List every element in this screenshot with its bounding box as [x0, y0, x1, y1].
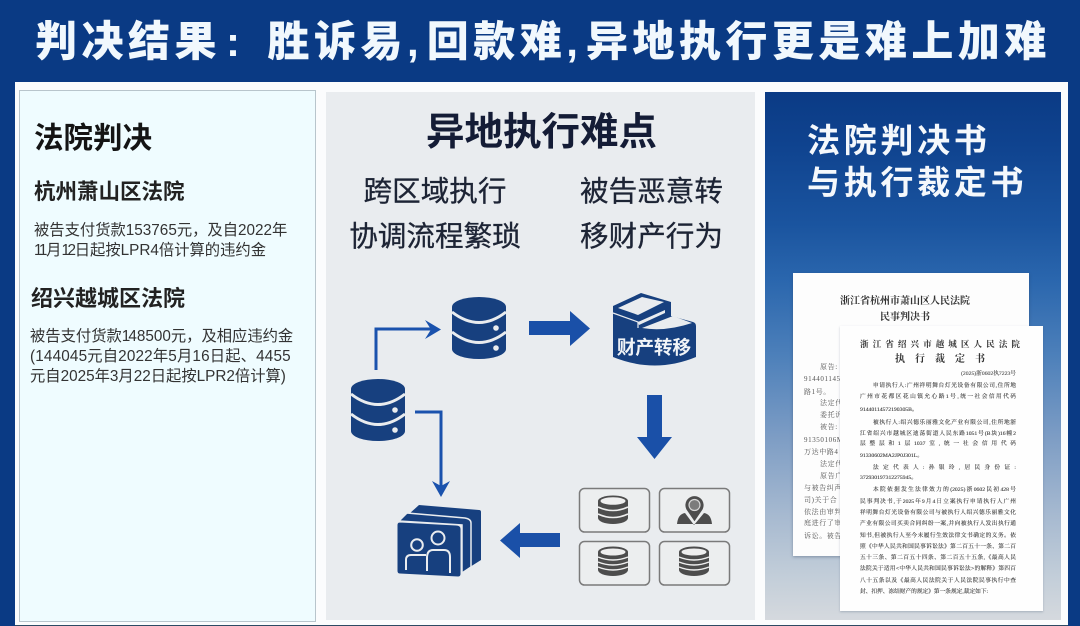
document text: ruling body: 91440114572190305B。	[860, 407, 918, 413]
panel: enforcement difficulties	[326, 92, 755, 620]
icon: asset transfer	[613, 293, 696, 366]
document text: ruling body: 本院依据发生法律效力的(2025)浙0602民初428号	[873, 487, 1016, 493]
bottom edge line	[15, 625, 1068, 626]
heading: judgment and ruling documents: 与执行裁定书	[807, 164, 1027, 201]
box: gray database 1	[580, 488, 650, 532]
heading: enforcement difficulties: 异地执行难点	[426, 111, 657, 154]
text: Hangzhou judgment: 11 月12 日起按LPR4倍计算的违约金	[34, 242, 266, 259]
text: Shaoxing judgment: 被告支付货款148500元，及相应违约金	[30, 328, 293, 345]
document text: ruling body: 照《中华人民共和国民事诉讼法》第二百五十一条、第二百	[860, 544, 1016, 550]
document text: civil judgment body: 被告:	[820, 423, 838, 431]
text: Shaoxing judgment: (144045元自2022年5月16日起、4455	[30, 348, 291, 365]
document: civil judgment	[793, 273, 1029, 556]
heading: court judgment: 法院判决	[34, 122, 152, 155]
document text: ruling body: 法定代表人:孙银玲,居民身份证:	[873, 465, 1016, 471]
document text: ruling body: 封、扣押、冻结财产的规定》第一条规定,裁定如下:	[860, 589, 988, 595]
panel: court judgment	[19, 90, 316, 622]
document text: ruling body	[860, 370, 1016, 595]
document text: ruling body: 五十三条、第二百五十四条、第二百五十五条,《最高人民	[860, 555, 1016, 561]
document title: civil judgment: 浙江省杭州市萧山区人民法院	[840, 296, 970, 307]
icon: database left	[351, 379, 405, 441]
document text: ruling body: 八十五条以及《最高人民法院关于人民法院民事执行中查	[860, 578, 1016, 584]
document title: court name: 浙江省绍兴市越城区人民法院	[860, 339, 1020, 349]
document text: ruling body: 江省绍兴市越城区迪荡街道人民东路1051号(B块)16幢2	[860, 431, 1016, 437]
document text: ruling body: 产业有限公司买卖合同纠纷一案,并向被执行人发出执行通	[860, 521, 1016, 527]
document: enforcement ruling	[839, 326, 1044, 613]
icon: people cards	[397, 505, 481, 577]
document text: civil judgment body	[804, 363, 840, 540]
text: Hangzhou judgment	[34, 222, 287, 259]
box: person location	[660, 488, 730, 532]
text: malicious asset transfer	[580, 176, 723, 253]
arrow: left to people	[500, 523, 560, 558]
document text: ruling body: 民事判决书,于2025年9月4日立案执行申请执行人广州	[860, 499, 1016, 505]
document text: civil judgment body: 司)关于合	[804, 496, 837, 504]
document text: ruling body: 法院关于适用<中华人民共和国民事诉讼法>的解释》第四百	[860, 566, 1016, 572]
heading: Hangzhou Xiaoshan court: 杭州萧山区法院	[34, 180, 185, 204]
label: asset transfer: 财产转移	[617, 337, 691, 358]
title: 判决结果 胜诉易,回款难,异地执行更是难上加难	[35, 18, 1051, 65]
text: malicious asset transfer: 被告恶意转	[580, 176, 723, 208]
document text: ruling body: (2025)浙0602执7223号	[961, 371, 1016, 377]
text: malicious asset transfer: 移财产行为	[580, 221, 723, 253]
document text: civil judgment body: 路1号。	[804, 388, 831, 396]
document text: ruling body: 91330602MA2JP0J301L。	[860, 453, 923, 459]
icon: database top	[452, 297, 506, 359]
arrow: left database to top database	[376, 320, 441, 370]
text: cross-region enforcement	[349, 176, 521, 253]
heading: Shaoxing Yuecheng court: 绍兴越城区法院	[31, 286, 185, 311]
text: Shaoxing judgment	[30, 328, 293, 385]
document title: civil judgment	[840, 295, 970, 323]
title: :	[226, 18, 240, 65]
document title: civil judgment: 民事判决书	[880, 312, 930, 323]
text: Shaoxing judgment: 元自2025年3月22日起按LPR2倍计算)	[30, 368, 286, 385]
box: gray database 2	[580, 542, 650, 585]
text: cross-region enforcement: 跨区域执行	[364, 176, 506, 208]
heading: judgment and ruling documents	[807, 122, 1027, 201]
document text: ruling body: 广州市花都区花山镇允心路1号,统一社会信用代码	[860, 394, 1016, 400]
document text: ruling body: 层整层和1层1037室,统一社会信用代码	[860, 441, 1016, 447]
document text: ruling body: 372930197312275945。	[860, 475, 917, 481]
arrow: left database to people	[415, 412, 450, 497]
document text: ruling body: 被执行人:绍兴德乐丽雅文化产业有限公司,住所地浙	[873, 420, 1016, 426]
arrow: down to assets	[637, 395, 672, 459]
panel: judgment documents	[765, 92, 1061, 620]
heading: judgment and ruling documents: 法院判决书	[807, 122, 990, 159]
text: cross-region enforcement: 协调流程繁琐	[349, 221, 521, 253]
document text: civil judgment body: 万达中路4	[804, 448, 838, 456]
document title: enforcement ruling: 执行裁定书	[895, 354, 985, 365]
box: gray database 3	[660, 542, 730, 585]
document text: ruling body: 祥明舞台灯光设备有限公司与被执行人绍兴德乐丽雅文化	[860, 510, 1016, 516]
document text: ruling body: 知书,但被执行人至今未履行生效法律文书确定的义务。依	[860, 533, 1016, 539]
text: Hangzhou judgment: 被告支付货款153765元，及自2022年	[34, 222, 287, 239]
arrow: right to asset transfer	[529, 311, 590, 346]
document text: civil judgment body: 原告:	[820, 363, 838, 371]
document text: ruling body: 申请执行人:广州祥明舞台灯光设备有限公司,住所地	[873, 383, 1016, 389]
